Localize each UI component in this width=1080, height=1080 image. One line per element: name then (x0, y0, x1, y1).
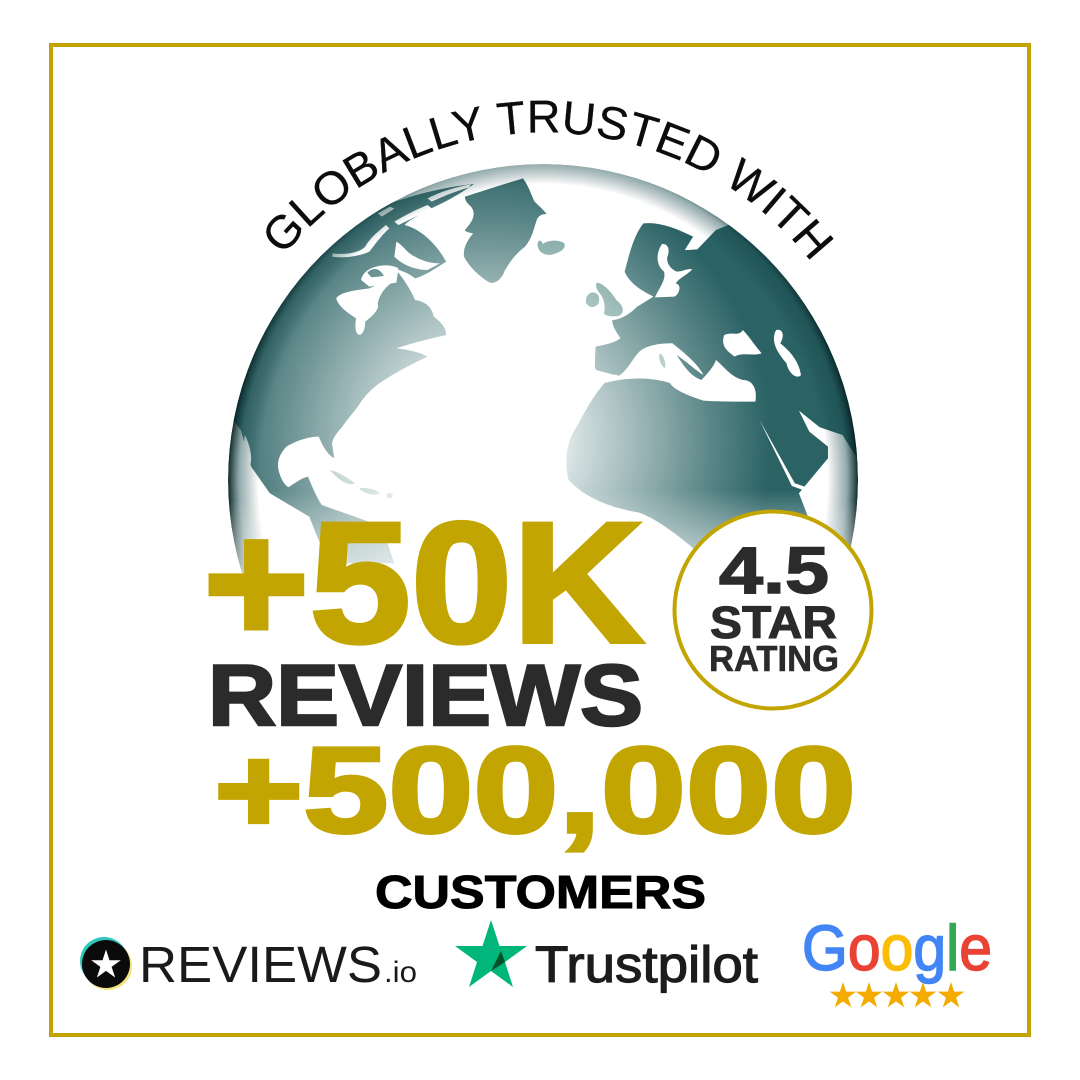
logo: REVIEWS.io (80, 936, 417, 993)
headline: +500,000: +500,000 (214, 722, 856, 858)
globe rim shading (228, 164, 858, 574)
islands (330, 269, 665, 498)
rating badge: RATING (709, 638, 839, 679)
logo: Trustpilot: Trustpilot (535, 936, 758, 993)
logo: Trustpilot (455, 920, 758, 993)
rating badge: STAR (710, 597, 837, 648)
headline: +50K: +50K (203, 487, 644, 679)
curved heading: GLOBALLY TRUSTED WITH (266, 100, 834, 260)
google stars (830, 982, 964, 1007)
bottom cover (215, 604, 875, 804)
rating badge: 4.5 (719, 533, 829, 607)
logo: Google: Google (802, 912, 992, 984)
bottom fade (274, 494, 808, 564)
ocean cut-outs (244, 184, 809, 492)
logo: REVIEWS.io: REVIEWS (139, 936, 382, 993)
headline: REVIEWS: REVIEWS (208, 648, 643, 744)
centre highlight (239, 178, 760, 564)
headline: CUSTOMERS: CUSTOMERS (375, 866, 706, 918)
globe (228, 164, 858, 574)
rating badge (674, 512, 872, 708)
land masses (234, 178, 857, 564)
logo: REVIEWS.io: .io (384, 956, 417, 989)
